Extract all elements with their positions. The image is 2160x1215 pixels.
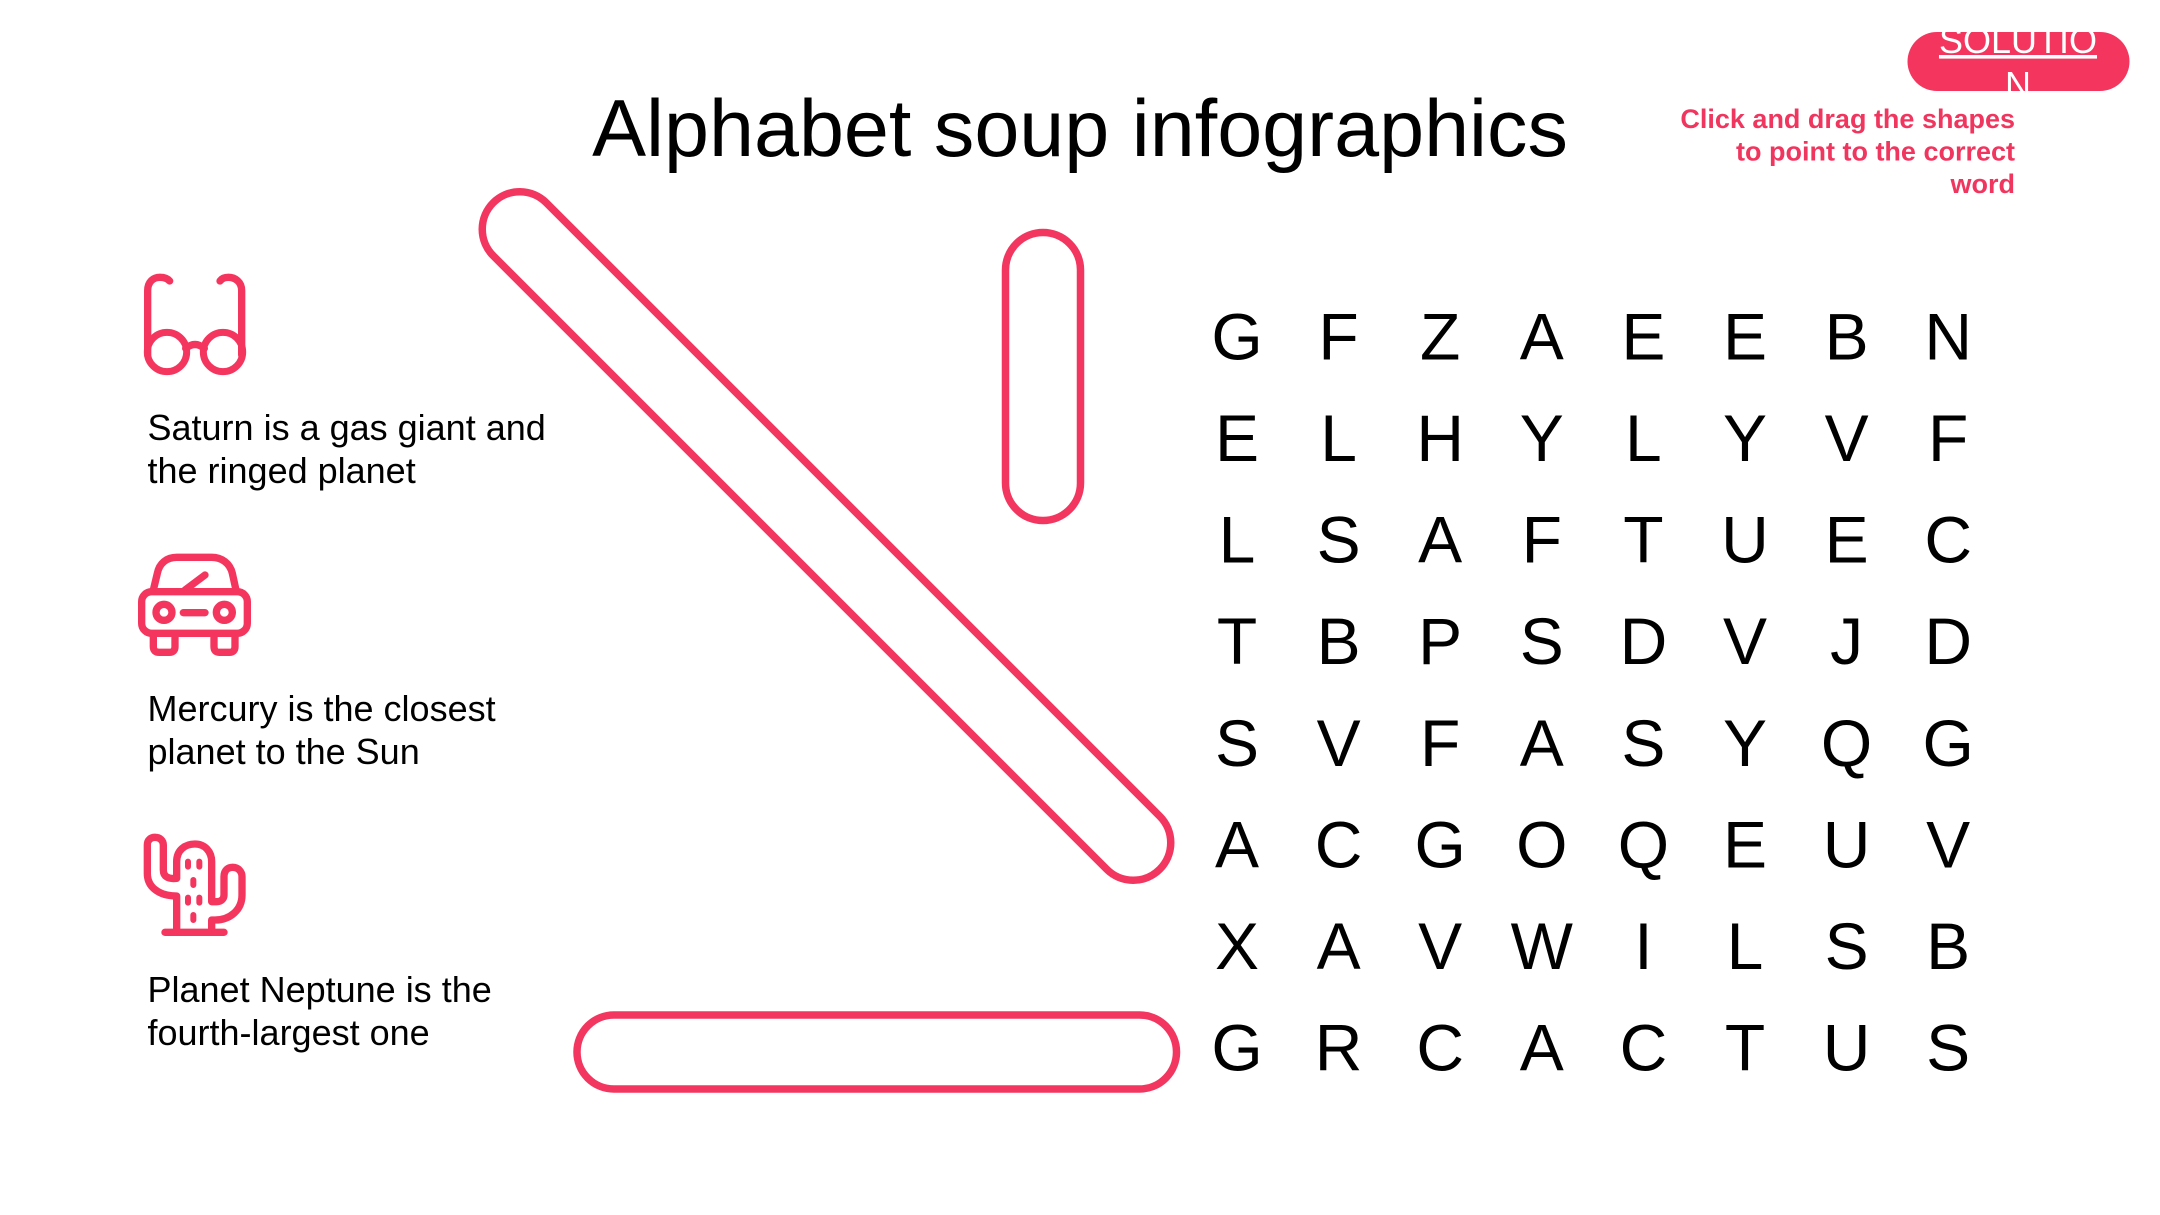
letter grid — [1211, 300, 1974, 1085]
text: Saturn: the ringed planet — [148, 450, 416, 491]
letter grid: H — [1416, 401, 1464, 475]
letter grid: A — [1520, 1011, 1564, 1085]
letter grid: G — [1923, 706, 1974, 780]
icon: cactus — [147, 837, 242, 932]
letter grid: Y — [1723, 706, 1767, 780]
letter grid: D — [1620, 604, 1667, 678]
letter grid: F — [1928, 401, 1968, 475]
letter grid: B — [1317, 604, 1361, 678]
letter grid: W — [1511, 909, 1574, 983]
text: Mercury — [148, 688, 496, 772]
icon: car — [142, 557, 247, 652]
letter grid: Q — [1618, 807, 1669, 881]
letter grid: L — [1625, 401, 1662, 475]
letter grid: R — [1315, 1011, 1362, 1085]
letter grid: C — [1416, 1011, 1464, 1085]
letter grid: F — [1522, 503, 1562, 577]
vertical selection shape — [1006, 232, 1080, 520]
letter grid: P — [1418, 604, 1462, 678]
letter grid: E — [1215, 401, 1259, 475]
instruction text: Click and drag the shapes — [1680, 104, 2015, 134]
letter grid: S — [1317, 503, 1361, 577]
letter grid: E — [1825, 503, 1869, 577]
letter grid: L — [1219, 503, 1255, 577]
letter grid: V — [1825, 401, 1869, 475]
instruction text — [1680, 104, 2015, 199]
solution button — [1908, 32, 2130, 91]
letter grid: T — [1217, 604, 1257, 678]
letter grid: I — [1634, 909, 1653, 983]
diagonal selection shape — [467, 176, 1186, 896]
letter grid: V — [1418, 909, 1462, 983]
letter grid: E — [1621, 300, 1665, 374]
text: Saturn — [148, 407, 546, 491]
letter grid: C — [1315, 807, 1362, 881]
text: Mercury: planet to the Sun — [148, 731, 420, 772]
letter grid: A — [1520, 300, 1564, 374]
letter grid: S — [1215, 706, 1259, 780]
letter grid: G — [1415, 807, 1466, 881]
letter grid: B — [1825, 300, 1869, 374]
letter grid: Y — [1723, 401, 1767, 475]
solution button: N — [2005, 64, 2031, 105]
letter grid: B — [1926, 909, 1970, 983]
letter grid: A — [1317, 909, 1361, 983]
letter grid: Z — [1420, 300, 1460, 374]
letter grid: C — [1620, 1011, 1667, 1085]
letter grid: A — [1520, 706, 1564, 780]
letter grid: V — [1723, 604, 1767, 678]
text: Neptune — [148, 969, 492, 1053]
letter grid: S — [1520, 604, 1564, 678]
letter grid: S — [1621, 706, 1665, 780]
letter grid: N — [1924, 300, 1972, 374]
letter grid: U — [1721, 503, 1769, 577]
letter grid: T — [1623, 503, 1664, 577]
letter grid: V — [1926, 807, 1970, 881]
text: Mercury: Mercury is the closest — [148, 688, 496, 729]
text: Neptune: Planet Neptune is the — [148, 969, 492, 1010]
letter grid: T — [1725, 1011, 1765, 1085]
letter grid: X — [1215, 909, 1259, 983]
letter grid: Q — [1821, 706, 1872, 780]
letter grid: G — [1211, 1011, 1263, 1085]
letter grid: A — [1418, 503, 1462, 577]
text: Saturn: Saturn is a gas giant and — [148, 407, 546, 448]
letter grid: F — [1318, 300, 1359, 374]
letter grid: S — [1825, 909, 1869, 983]
letter grid: U — [1823, 807, 1870, 881]
letter grid: O — [1516, 807, 1567, 881]
letter grid: F — [1420, 706, 1460, 780]
letter grid: D — [1924, 604, 1972, 678]
letter grid: S — [1926, 1011, 1970, 1085]
letter grid: E — [1723, 300, 1767, 374]
horizontal selection shape — [577, 1015, 1176, 1089]
letter grid: L — [1320, 401, 1357, 475]
letter grid: E — [1723, 807, 1767, 881]
letter grid: U — [1823, 1011, 1870, 1085]
letter grid: C — [1924, 503, 1972, 577]
solution button: SOLUTIO — [1939, 20, 2097, 61]
instruction text: word — [1950, 169, 2015, 199]
instruction text: to point to the correct — [1736, 136, 2015, 166]
text: Neptune: fourth-largest one — [148, 1012, 430, 1053]
letter grid: V — [1317, 706, 1361, 780]
letter grid: L — [1727, 909, 1763, 983]
letter grid: J — [1830, 604, 1863, 678]
letter grid: A — [1215, 807, 1259, 881]
letter grid: Y — [1520, 401, 1564, 475]
title: Alphabet soup infographics — [592, 84, 1568, 174]
letter grid: G — [1211, 300, 1263, 374]
icon: glasses — [147, 277, 243, 372]
